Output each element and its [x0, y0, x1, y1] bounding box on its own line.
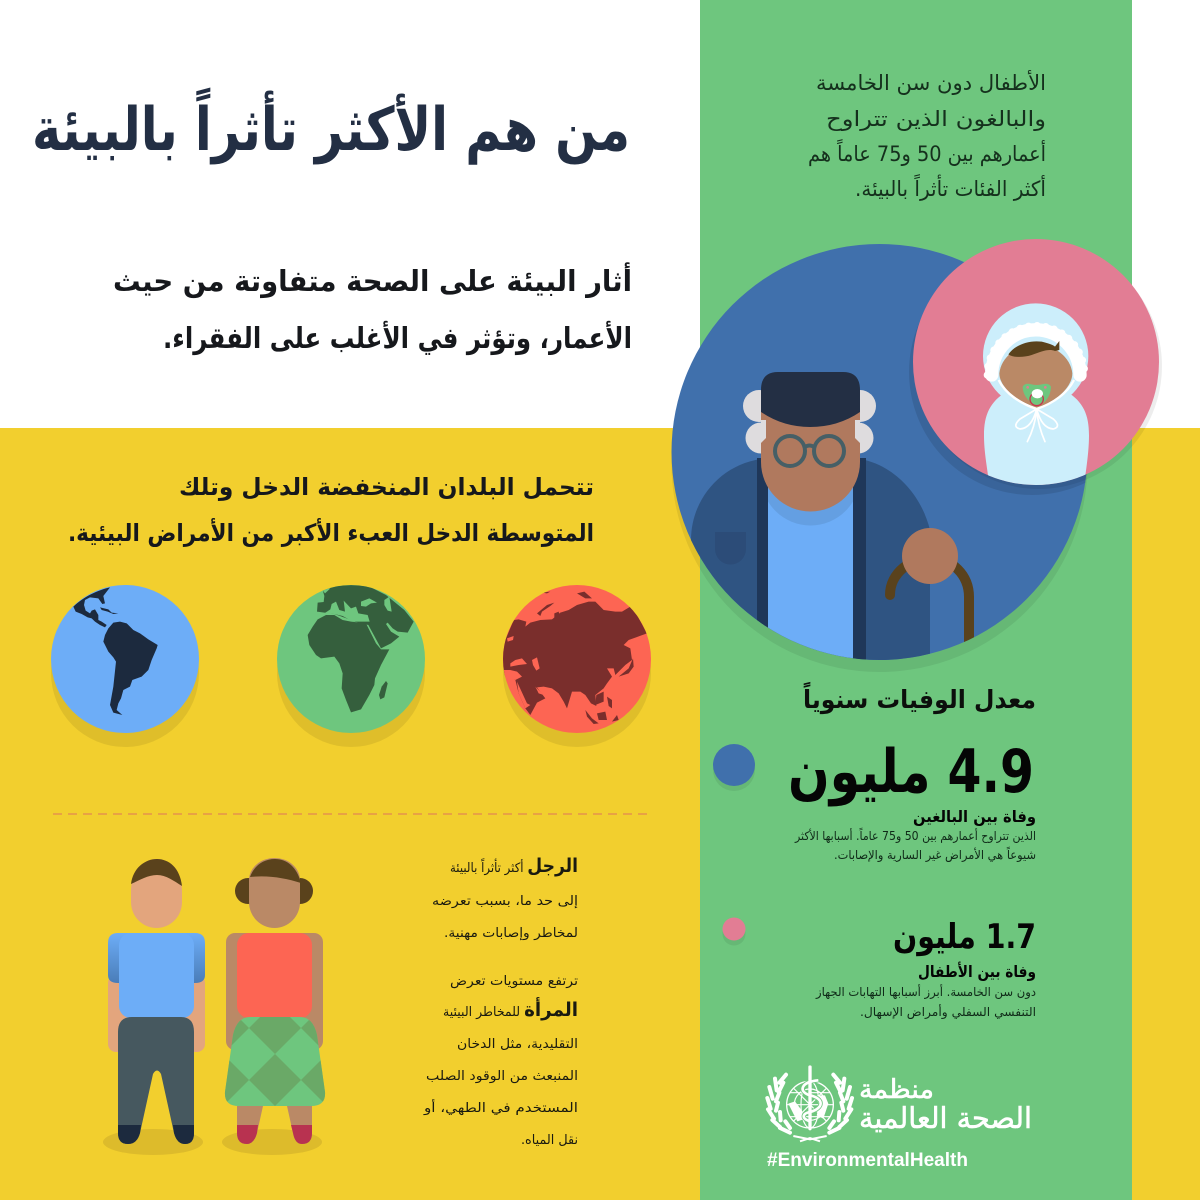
- illustration: woman figure: [222, 858, 326, 1155]
- text block: most affected age groups: [808, 70, 1046, 201]
- text block: burden on low and middle income countries: المتوسطة الدخل العبء الأكبر من الأمراض البيئية.: [68, 518, 594, 547]
- text block: men and women exposure: المرأة للمخاطر البيئية: [443, 997, 578, 1021]
- statistic: children deaths: 1.7 مليون: [893, 917, 1036, 957]
- title: من هم الأكثر تأثراً بالبيئة: [32, 87, 630, 165]
- text block: burden on low and middle income countries: [68, 473, 594, 547]
- statistic: adults deaths: 4.9 مليون: [788, 737, 1034, 807]
- statistic: children deaths: [815, 917, 1036, 1020]
- text block: men and women exposure: المستخدم في الطهي، أو: [423, 1099, 578, 1116]
- logo: WHO name in Arabic: [859, 1075, 1032, 1135]
- text block: most affected age groups: أعمارهم بين 50 و75 عاماً هم: [808, 138, 1046, 167]
- statistic: adults deaths: الذين تتراوح أعمارهم بين 50 و75 عاماً. أسبابها الأكثر: [794, 827, 1036, 844]
- divider: dashed line: [53, 813, 648, 815]
- logo: WHO emblem: [767, 1067, 852, 1141]
- text block: men and women exposure: نقل المياه.: [521, 1133, 578, 1148]
- text block: most affected age groups: والبالغون الذين تتراوح: [826, 107, 1046, 131]
- statistic: adults deaths: شيوعاً هي الأمراض غير السارية والإصابات.: [834, 846, 1036, 863]
- illustration: man figure: [103, 859, 205, 1155]
- icon: blue marker dot: [713, 744, 755, 791]
- text block: most affected age groups: الأطفال دون سن الخامسة: [816, 70, 1046, 95]
- icon: pink marker dot: [722, 918, 746, 946]
- text block: men and women exposure: لمخاطر وإصابات مهنية.: [444, 926, 578, 941]
- panel: green column: [700, 0, 1132, 1200]
- icon: globe Africa: [277, 585, 425, 747]
- text block: intro: أثار البيئة على الصحة متفاوتة من حيث: [113, 262, 632, 298]
- logo: WHO name in Arabic: الصحة العالمية: [859, 1101, 1032, 1135]
- logo: WHO name in Arabic: منظمة: [859, 1075, 934, 1105]
- panel: yellow lower band: [0, 428, 1200, 1200]
- text block: men and women exposure: ترتفع مستويات تعرض: [450, 974, 578, 989]
- infant in bonnet: [983, 303, 1089, 502]
- text block: intro: الأعمار، وتؤثر في الأغلب على الفقراء.: [163, 320, 632, 355]
- text block: burden on low and middle income countries: تتحمل البلدان المنخفضة الدخل وتلك: [179, 473, 594, 501]
- illustration: elderly man and infant circles: [672, 239, 1162, 700]
- statistic: children deaths: التنفسي السفلي وأمراض الإسهال.: [860, 1004, 1036, 1020]
- statistic: children deaths: وفاة بين الأطفال: [918, 962, 1036, 981]
- text block: men and women exposure: إلى حد ما، بسبب تعرضه: [432, 894, 578, 909]
- statistic: adults deaths: [788, 737, 1036, 863]
- hashtag: #EnvironmentalHealth: [767, 1150, 968, 1171]
- heading: annual death rate: معدل الوفيات سنوياً: [803, 682, 1036, 715]
- text block: men and women exposure: المنبعث من الوقود الصلب: [426, 1069, 578, 1084]
- statistic: children deaths: دون سن الخامسة. أبرز أسبابها التهابات الجهاز: [815, 984, 1036, 1000]
- text block: men and women exposure: التقليدية، مثل الدخان: [457, 1037, 578, 1052]
- text block: men and women exposure: الرجل أكثر تأثراً بالبيئة: [450, 855, 578, 877]
- statistic: adults deaths: وفاة بين البالغين: [913, 807, 1036, 826]
- icon: globe Americas: [51, 585, 199, 747]
- elderly man: [691, 372, 974, 660]
- text block: men and women exposure: [423, 855, 578, 1148]
- text block: most affected age groups: أكثر الفئات تأثراً بالبيئة.: [855, 173, 1046, 201]
- icon: globe Asia: [500, 585, 651, 747]
- text block: intro: [113, 262, 632, 355]
